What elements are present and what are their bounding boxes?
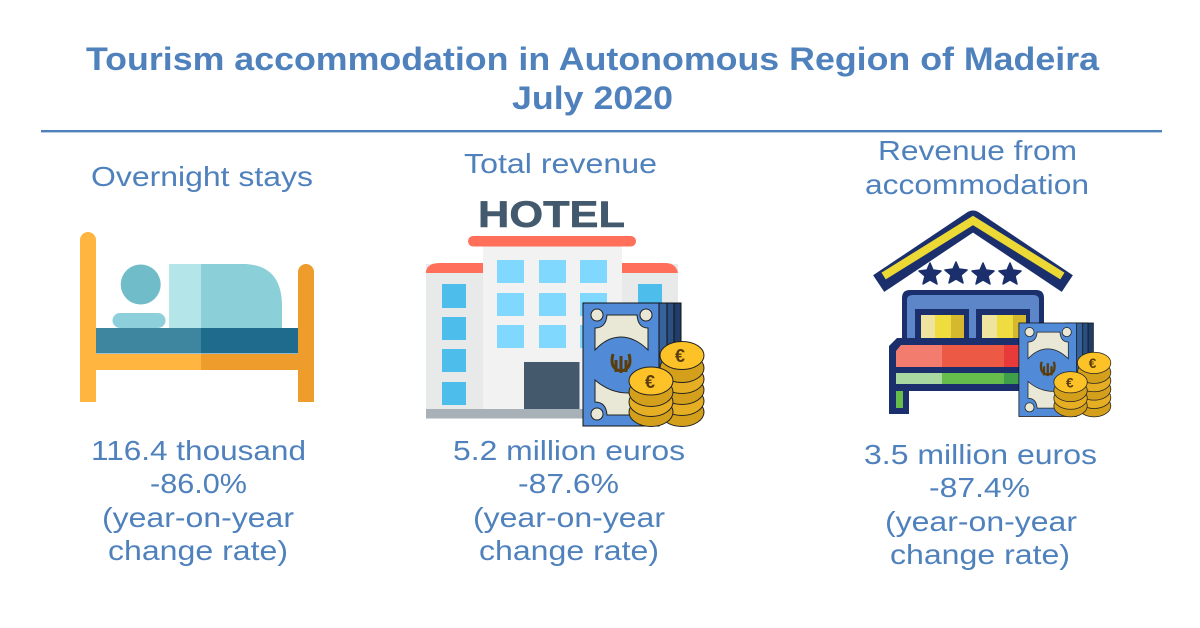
stat: overnight stays [91,435,306,566]
icon: starred bed with money [884,220,1111,417]
stat: total revenue: (year-on-year [473,502,665,533]
icon: hotel building with money: HOTEL [478,194,625,235]
panel: revenue from accommodation [864,135,1111,570]
heading: total revenue: Total revenue [464,148,657,179]
panel: total revenue [426,148,704,566]
heading: revenue from accommodation: accommodation [865,169,1089,200]
stat: revenue from accommodation: 3.5 million euros [864,439,1097,470]
heading: revenue from accommodation: Revenue from [878,135,1077,166]
heading: overnight stays: Overnight stays [91,161,313,192]
icon: hotel building with money [426,194,704,426]
stat: total revenue: change rate) [479,535,659,566]
stat: total revenue: 5.2 million euros [453,435,685,466]
title [86,41,1100,116]
stat: revenue from accommodation [864,439,1097,570]
stat: revenue from accommodation: -87.4% [929,472,1030,503]
heading: revenue from accommodation [865,135,1089,200]
stat: revenue from accommodation: (year-on-year [885,506,1077,537]
icon: person in bed [80,232,314,402]
stat: overnight stays: -86.0% [150,468,247,499]
title: Tourism accommodation in Autonomous Region of Madeira [86,41,1100,77]
stat: revenue from accommodation: change rate) [890,539,1070,570]
stat: overnight stays: (year-on-year [102,502,294,533]
stat: total revenue [453,435,685,566]
title: July 2020 [512,80,673,116]
stat: overnight stays: change rate) [108,535,288,566]
stat: overnight stays: 116.4 thousand [91,435,306,466]
stat: total revenue: -87.6% [518,468,619,499]
panel: overnight stays [80,161,314,566]
